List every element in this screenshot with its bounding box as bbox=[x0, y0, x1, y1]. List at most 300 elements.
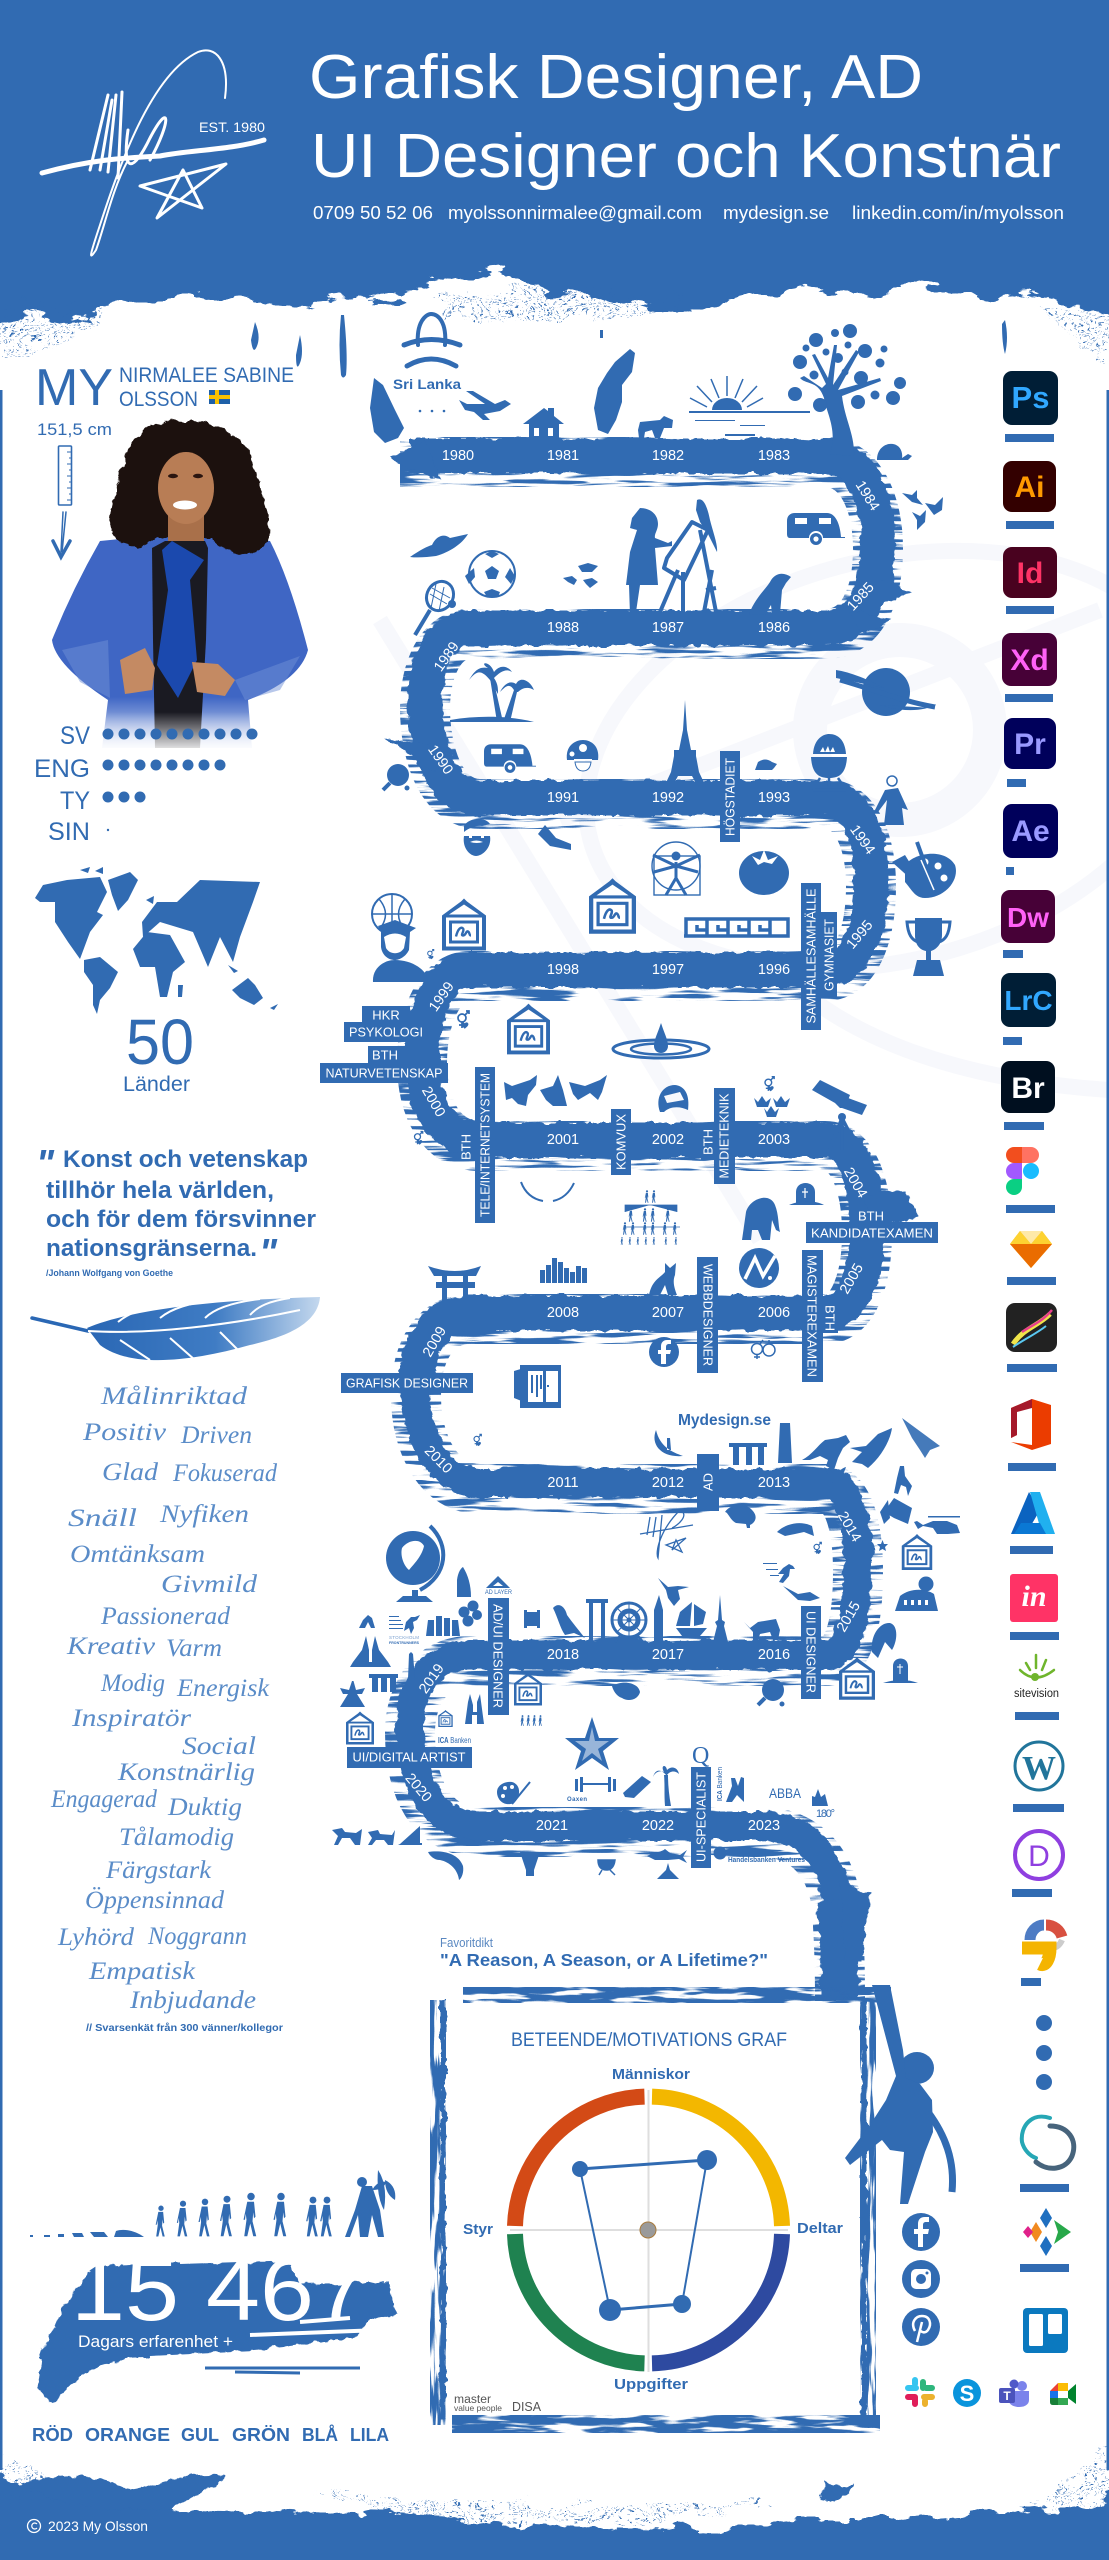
smile and eyes bbox=[168, 474, 203, 510]
year labels: 1988 bbox=[547, 620, 579, 636]
year labels: 1992 bbox=[652, 790, 684, 806]
icon: mushroom bbox=[567, 740, 598, 771]
year labels: 2016 bbox=[758, 1647, 790, 1663]
skill bar: wordpress bbox=[1013, 1804, 1064, 1812]
year labels: 2008 bbox=[547, 1305, 579, 1321]
year labels: 2018 bbox=[547, 1647, 579, 1663]
greenland bbox=[108, 872, 138, 911]
icon: small star bbox=[877, 1540, 888, 1551]
icon: dumbbell bbox=[575, 1777, 616, 1792]
year labels: 1982 bbox=[652, 448, 684, 464]
evolution silhouettes bbox=[30, 2170, 395, 2237]
year labels: 1997 bbox=[652, 962, 684, 978]
icon: colosseum bbox=[895, 1590, 938, 1611]
icon: invision: in bbox=[1021, 1580, 1047, 1613]
master value people credit: DISA bbox=[512, 2400, 542, 2414]
opening quote mark: " bbox=[36, 1143, 55, 1185]
master value people credit bbox=[454, 2394, 542, 2414]
arc: red bbox=[515, 2097, 644, 2226]
oaxen logo: Oaxen bbox=[567, 1797, 587, 1803]
year labels: 1983 bbox=[758, 448, 790, 464]
icon: swedish flag bbox=[209, 390, 230, 404]
mydesign label: Mydesign.se bbox=[678, 1412, 771, 1429]
language labels: SIN bbox=[48, 818, 90, 846]
label: högstadiet bbox=[720, 751, 740, 842]
icon: group of people bbox=[521, 1715, 542, 1726]
icon: parrot bbox=[696, 499, 717, 552]
icon: shrimp bbox=[428, 1851, 463, 1880]
crosshair bbox=[510, 2090, 788, 2372]
abba logo: ABBA bbox=[769, 1785, 802, 1801]
icon: framed art 7 bbox=[839, 1657, 875, 1700]
stockholm frontrunners logo bbox=[389, 1615, 420, 1645]
year labels: 2004 bbox=[840, 1165, 870, 1201]
islands bbox=[80, 867, 278, 1010]
master value people credit: master bbox=[454, 2394, 491, 2406]
year labels: 1999 bbox=[426, 979, 458, 1015]
personality words: Snäll bbox=[68, 1505, 137, 1532]
label: webbdesigner: WEBBDESIGNER bbox=[700, 1264, 716, 1366]
icon: lightroom classic bbox=[1001, 973, 1056, 1027]
icon: wordpress bbox=[1015, 1742, 1063, 1790]
year labels: 1987 bbox=[652, 620, 684, 636]
height value: 151,5 cm bbox=[37, 420, 112, 439]
label: ui/digital artist bbox=[347, 1747, 472, 1768]
master value people credit: value people bbox=[454, 2403, 502, 2413]
icon: facebook bbox=[649, 1337, 679, 1367]
brush stroke bbox=[37, 2262, 396, 2405]
icon: framed art 6 bbox=[438, 1710, 453, 1727]
year labels: 2009 bbox=[420, 1324, 450, 1360]
icon: helmet bbox=[658, 1085, 688, 1112]
year labels: 2003 bbox=[758, 1132, 790, 1148]
icon: wedding rings bbox=[752, 1340, 775, 1359]
surname: OLSSON bbox=[119, 388, 198, 411]
year labels: 1985 bbox=[844, 580, 878, 614]
icon: girl painting bbox=[626, 508, 672, 615]
icon: acrobat bbox=[894, 1466, 912, 1496]
axis labels: Uppgifter bbox=[614, 2376, 688, 2393]
icon: shuttlecock bbox=[520, 1852, 540, 1876]
personality words: Nyfiken bbox=[159, 1501, 249, 1528]
icon: figma bbox=[1006, 1147, 1039, 1195]
languages bbox=[34, 722, 258, 846]
icon: framed art 8 bbox=[514, 1672, 542, 1706]
icon: palm tree bbox=[653, 1766, 679, 1806]
icon: procreate bbox=[1006, 1303, 1057, 1352]
icon: platypus bbox=[783, 1586, 820, 1601]
personality words bbox=[50, 1383, 277, 2014]
icon: planet bbox=[836, 668, 936, 716]
icon: skype: S bbox=[960, 2381, 974, 2406]
copyright icon bbox=[28, 2520, 40, 2532]
monkey body and limbs bbox=[845, 1985, 933, 2204]
personality words: Positiv bbox=[82, 1419, 167, 1446]
name block bbox=[35, 359, 294, 417]
skill bar: azure bbox=[1010, 1546, 1053, 1554]
icon: dice bbox=[880, 1498, 912, 1524]
icon: snail bbox=[877, 444, 912, 460]
icon: ruler bbox=[58, 446, 72, 505]
icon: photoshop: Ps bbox=[1012, 380, 1049, 415]
jacket bbox=[52, 535, 308, 748]
icon: dog sled bbox=[332, 1826, 422, 1845]
icon: marina bay sands bbox=[729, 1443, 767, 1465]
icon: landmark tower bbox=[657, 1863, 679, 1879]
height bbox=[37, 420, 112, 557]
icon: burj al arab bbox=[457, 1567, 471, 1597]
axis labels: Människor bbox=[612, 2066, 690, 2083]
year labels: 1991 bbox=[547, 790, 579, 806]
language labels bbox=[34, 722, 90, 846]
icon: google meet bbox=[1050, 2383, 1076, 2405]
icon: grave bbox=[789, 1183, 824, 1205]
label: ad/ui designer bbox=[488, 1598, 509, 1715]
survey note: // Svarsenkät från 300 vänner/kollegor bbox=[86, 2022, 283, 2034]
tie bbox=[157, 541, 204, 698]
chart centre bbox=[640, 2222, 656, 2238]
icon: facebook bbox=[902, 2213, 940, 2251]
year labels: 1995 bbox=[844, 917, 876, 953]
label: hkr bbox=[362, 1006, 410, 1023]
skill bar: after effects bbox=[1006, 867, 1014, 875]
label: bth vertical: BTH bbox=[458, 1134, 474, 1160]
year labels: 2022 bbox=[642, 1818, 674, 1834]
software skills column bbox=[1001, 371, 1074, 2353]
personality words: Omtänksam bbox=[70, 1541, 205, 1568]
icon: birds bbox=[902, 490, 943, 530]
contact details: myolssonnirmalee@gmail.com bbox=[448, 203, 702, 223]
brush streaks bbox=[140, 2258, 380, 2370]
label: magisterexamen bbox=[802, 1250, 823, 1382]
icon: hanging monkey bbox=[845, 1985, 953, 2204]
icon: turtle bbox=[755, 760, 777, 770]
personality words: Fokuserad bbox=[172, 1460, 277, 1487]
skill bar: procreate bbox=[1007, 1364, 1057, 1372]
icon: equalizer bars bbox=[540, 1258, 587, 1283]
hands bbox=[120, 648, 235, 696]
label: ui designer: UI DESIGNER bbox=[804, 1611, 818, 1693]
icon: illustrator: Ai bbox=[1014, 471, 1044, 504]
bottom splashes bbox=[20, 2475, 855, 2510]
label: medieteknik bbox=[714, 1088, 735, 1184]
year labels: 1990 bbox=[424, 742, 456, 778]
ad layer logo: AD LAYER bbox=[485, 1590, 513, 1596]
skill bar: xd bbox=[1005, 694, 1053, 702]
language labels: ENG bbox=[34, 755, 90, 783]
year labels: 2014 bbox=[834, 1509, 864, 1545]
personality words: Modig bbox=[100, 1670, 165, 1697]
label: psykologi bbox=[344, 1022, 428, 1042]
timeline icons bbox=[332, 314, 960, 1880]
first name: MY bbox=[35, 359, 113, 417]
year labels: 1984 bbox=[852, 478, 882, 514]
icon: paint palette bbox=[892, 842, 956, 898]
year labels: 2006 bbox=[758, 1305, 790, 1321]
days count: 15 467 bbox=[71, 2240, 368, 2339]
icon: goldfish bbox=[563, 563, 598, 588]
personality words: Färgstark bbox=[105, 1857, 212, 1884]
year labels: 2000 bbox=[418, 1084, 448, 1120]
icon: dreamweaver bbox=[1001, 890, 1055, 943]
label: ui-specialist bbox=[691, 1767, 711, 1868]
icon: gender 4 bbox=[814, 1542, 821, 1554]
signature logo bbox=[42, 50, 264, 256]
icon: water drop bbox=[613, 1023, 709, 1058]
icon: wordpress: W bbox=[1022, 1750, 1056, 1787]
icon: premiere bbox=[1004, 718, 1056, 769]
icon: globe and graduate bbox=[372, 894, 428, 982]
icon: honeycomb bbox=[458, 1600, 482, 1626]
world map bbox=[35, 867, 278, 1014]
skill bar: illustrator bbox=[1006, 521, 1054, 529]
label: kandidatexamen: KANDIDATEXAMEN bbox=[811, 1226, 933, 1240]
icon: dachshund bbox=[638, 416, 673, 438]
quote text: Konst och vetenskap bbox=[63, 1146, 308, 1173]
icon: cathedral bbox=[465, 1694, 484, 1724]
social media icons bbox=[902, 2213, 940, 2346]
icon: after effects bbox=[1003, 804, 1058, 858]
monkey head bbox=[900, 2052, 934, 2084]
icon: thai gate bbox=[586, 1599, 608, 1641]
road main lower bbox=[410, 1390, 858, 1920]
personality words: Tålamodig bbox=[119, 1824, 234, 1851]
personality words: Givmild bbox=[161, 1571, 258, 1598]
color words: RÖD bbox=[32, 2425, 73, 2445]
label: kandidatexamen bbox=[806, 1222, 938, 1243]
axis labels: Styr bbox=[463, 2221, 493, 2238]
icon: shark bbox=[647, 1849, 687, 1863]
icon: grave and gender bbox=[883, 1658, 918, 1683]
skill bar: sitevision bbox=[1015, 1712, 1059, 1720]
icon: kiwi bird bbox=[725, 1505, 756, 1528]
stockholm frontrunners logo: FRONTRUNNERS bbox=[389, 1641, 420, 1645]
skill bar: premiere bbox=[1007, 779, 1026, 787]
color words: GRÖN bbox=[232, 2425, 290, 2445]
icon: office bbox=[1011, 1399, 1051, 1450]
year labels: 1994 bbox=[846, 822, 878, 858]
label: medieteknik: MEDIETEKNIK bbox=[716, 1093, 732, 1178]
icon: small signature bbox=[640, 1510, 693, 1558]
icon: dancers bbox=[726, 1777, 744, 1802]
personality words: Kreativ bbox=[66, 1633, 156, 1660]
icon: ping pong paddle bbox=[383, 764, 410, 790]
year labels: 1981 bbox=[547, 448, 579, 464]
icon: junk ship bbox=[676, 1602, 707, 1636]
icon: skype bbox=[953, 2379, 981, 2407]
title line 2: UI Designer och Konstnär bbox=[311, 122, 1061, 191]
skill bar: figma bbox=[1006, 1205, 1055, 1213]
icon: helicopter bbox=[914, 1516, 960, 1534]
icon: premiere: Pr bbox=[1014, 728, 1046, 761]
countries count bbox=[123, 1006, 194, 1096]
number 50: 50 bbox=[126, 1006, 194, 1078]
icon: xd: Xd bbox=[1010, 644, 1049, 677]
label: ui-specialist: UI-SPECIALIST bbox=[694, 1772, 708, 1862]
year labels: 1986 bbox=[758, 620, 790, 636]
icon: pinterest bbox=[902, 2308, 940, 2346]
hair bbox=[110, 421, 269, 554]
icon: whale tail bbox=[824, 1467, 846, 1483]
icon: ferris wheel bbox=[612, 1603, 646, 1642]
faint watermark bbox=[380, 487, 1109, 1240]
color words: ORANGE bbox=[85, 2425, 170, 2445]
icon: desk globe bbox=[386, 1526, 443, 1602]
ica banken logo: ICA Banken bbox=[438, 1736, 471, 1745]
icon: rocket bbox=[850, 1428, 892, 1468]
icon: tomato bbox=[739, 850, 789, 895]
icon: moose bbox=[744, 1619, 780, 1640]
icon: sri lanka island bbox=[370, 378, 404, 443]
year labels: 2021 bbox=[536, 1818, 568, 1834]
icon: greek key bbox=[684, 919, 788, 936]
skill bar: divi bbox=[1012, 1889, 1052, 1897]
label: hkr: HKR bbox=[372, 1008, 400, 1022]
arc: blue bbox=[652, 2234, 782, 2363]
icon: big ben bbox=[654, 1595, 663, 1642]
icon: teams bbox=[999, 2380, 1029, 2407]
axis labels bbox=[463, 2066, 843, 2393]
skill bar: dreamweaver bbox=[1003, 950, 1023, 958]
year labels: 2007 bbox=[652, 1305, 684, 1321]
icon: hibiscus bbox=[918, 1576, 934, 1592]
icon: easel bbox=[660, 522, 716, 612]
face bbox=[158, 452, 214, 524]
label: bth kandidat: BTH bbox=[858, 1208, 884, 1224]
icon: house bbox=[523, 408, 564, 441]
arc: green bbox=[515, 2234, 644, 2363]
label: bth magister: BTH bbox=[822, 1305, 838, 1331]
label: ad/ui designer: AD/UI DESIGNER bbox=[490, 1604, 506, 1708]
ad layer logo bbox=[485, 1576, 513, 1596]
icon: gender heart 2 bbox=[414, 1132, 423, 1145]
icon: bearded man bbox=[464, 819, 490, 856]
favourite poem bbox=[440, 1935, 768, 1970]
icon: wardrobe bbox=[514, 1365, 561, 1408]
icon: telescope bbox=[812, 1080, 867, 1157]
icon: skydiver bbox=[658, 1578, 689, 1606]
icon: torii gate bbox=[428, 1266, 481, 1307]
title line 1: Grafisk Designer, AD bbox=[309, 43, 923, 112]
icon: big star bbox=[565, 1717, 619, 1770]
skill bar: data studio bbox=[1021, 1978, 1041, 1986]
year labels: 2017 bbox=[652, 1647, 684, 1663]
quote text: nationsgränserna. bbox=[46, 1235, 257, 1262]
label: ui designer bbox=[801, 1606, 821, 1699]
icon: ring logo bbox=[1022, 2117, 1074, 2168]
icon: cats bbox=[504, 1075, 607, 1106]
quadrant arcs bbox=[515, 2097, 782, 2363]
icon: pisa tower bbox=[778, 1423, 792, 1463]
personality words: Engagerad bbox=[50, 1786, 157, 1813]
color words: BLÅ bbox=[302, 2425, 338, 2445]
icon: trello bbox=[1023, 2308, 1068, 2353]
label: tele/internetsystem: TELE/INTERNETSYSTEM bbox=[478, 1073, 492, 1217]
icon: kangaroo bbox=[802, 1435, 850, 1470]
icon: ping pong paddle 2 bbox=[758, 1679, 784, 1706]
label: ui/digital artist: UI/DIGITAL ARTIST bbox=[352, 1750, 466, 1764]
road brush flares bbox=[385, 440, 918, 1960]
sri lanka label: Sri Lanka bbox=[393, 377, 462, 392]
est. 1980: EST. 1980 bbox=[199, 119, 265, 135]
icon: sunset bbox=[689, 376, 810, 436]
icon: sneaker bbox=[538, 825, 571, 850]
icon: illustrator bbox=[1003, 461, 1056, 512]
icon: greek columns bbox=[369, 1674, 398, 1692]
icon: runner bbox=[763, 1563, 795, 1583]
personality words: Lyhörd bbox=[57, 1924, 135, 1951]
year labels: 2005 bbox=[837, 1261, 867, 1297]
profile polygon bbox=[572, 2150, 717, 2321]
icon: instagram bbox=[902, 2260, 940, 2298]
icon: swoosh smile bbox=[521, 1182, 574, 1201]
year labels: 2020 bbox=[402, 1770, 434, 1806]
sleeve detail bbox=[62, 640, 300, 700]
handelsbanken logo: Handelsbanken Ventures bbox=[728, 1857, 805, 1864]
label: samhälle: SAMHÄLLESAMHÄLLE bbox=[804, 888, 818, 1024]
icon: sketch bbox=[1010, 1231, 1052, 1268]
icon: castle bbox=[812, 1789, 828, 1806]
label: psykologi: PSYKOLOGI bbox=[349, 1024, 423, 1040]
black shirt bbox=[152, 541, 208, 748]
icon: oyster bbox=[612, 1683, 640, 1700]
personality words: Driven bbox=[180, 1422, 252, 1449]
feather bbox=[32, 1297, 320, 1360]
skill bar: bridge bbox=[1004, 1122, 1044, 1130]
icon: framed art 4 bbox=[902, 1534, 932, 1570]
experience brush panel bbox=[37, 2240, 396, 2405]
middle names: NIRMALEE SABINE bbox=[119, 364, 294, 387]
icon: gender heart bbox=[458, 1011, 469, 1029]
icon: sitevision: sitevision bbox=[1014, 1688, 1059, 1700]
handelsbanken logo bbox=[714, 1846, 805, 1864]
icon: puffin bbox=[553, 1605, 585, 1638]
icon: obelisk bbox=[408, 1652, 415, 1679]
eurasia bbox=[142, 880, 260, 967]
drips bbox=[251, 315, 1007, 378]
days label: Dagars erfarenhet + bbox=[78, 2332, 233, 2351]
contact details: 0709 50 52 06 bbox=[313, 203, 433, 223]
icon: libra bbox=[404, 314, 460, 366]
icon: sitting dog bbox=[749, 574, 791, 615]
label: magisterexamen: MAGISTEREXAMEN bbox=[804, 1255, 820, 1377]
personality words: Konstnärlig bbox=[117, 1759, 255, 1786]
neck bbox=[168, 510, 204, 559]
label: ad bbox=[697, 1454, 719, 1511]
icon: sweden bbox=[594, 349, 635, 434]
icon: stonehenge bbox=[426, 1616, 460, 1636]
icon: vitruvian man bbox=[652, 842, 700, 895]
icon: framed art 5 bbox=[346, 1711, 374, 1745]
ica banken vertical: ICA Banken bbox=[715, 1767, 724, 1801]
label: grafisk designer: GRAFISK DESIGNER bbox=[346, 1376, 468, 1390]
north america bbox=[35, 877, 107, 959]
color words: LILA bbox=[350, 2425, 389, 2445]
icon: teams: T bbox=[1003, 2389, 1011, 2403]
attribution: /Johann Wolfgang von Goethe bbox=[46, 1268, 173, 1278]
label: ad: AD bbox=[700, 1473, 716, 1491]
arc: yellow bbox=[652, 2097, 782, 2226]
south america bbox=[84, 957, 118, 1014]
quote text: tillhör hela världen, bbox=[46, 1177, 274, 1204]
fade bbox=[85, 712, 285, 754]
personality words: Inspiratör bbox=[71, 1705, 191, 1732]
personality words: Öppensinnad bbox=[85, 1886, 225, 1914]
color words bbox=[32, 2425, 389, 2445]
favourite label: Favoritdikt bbox=[440, 1935, 493, 1950]
180 label: 180° bbox=[816, 1808, 835, 1820]
personality words: Energisk bbox=[176, 1675, 270, 1702]
